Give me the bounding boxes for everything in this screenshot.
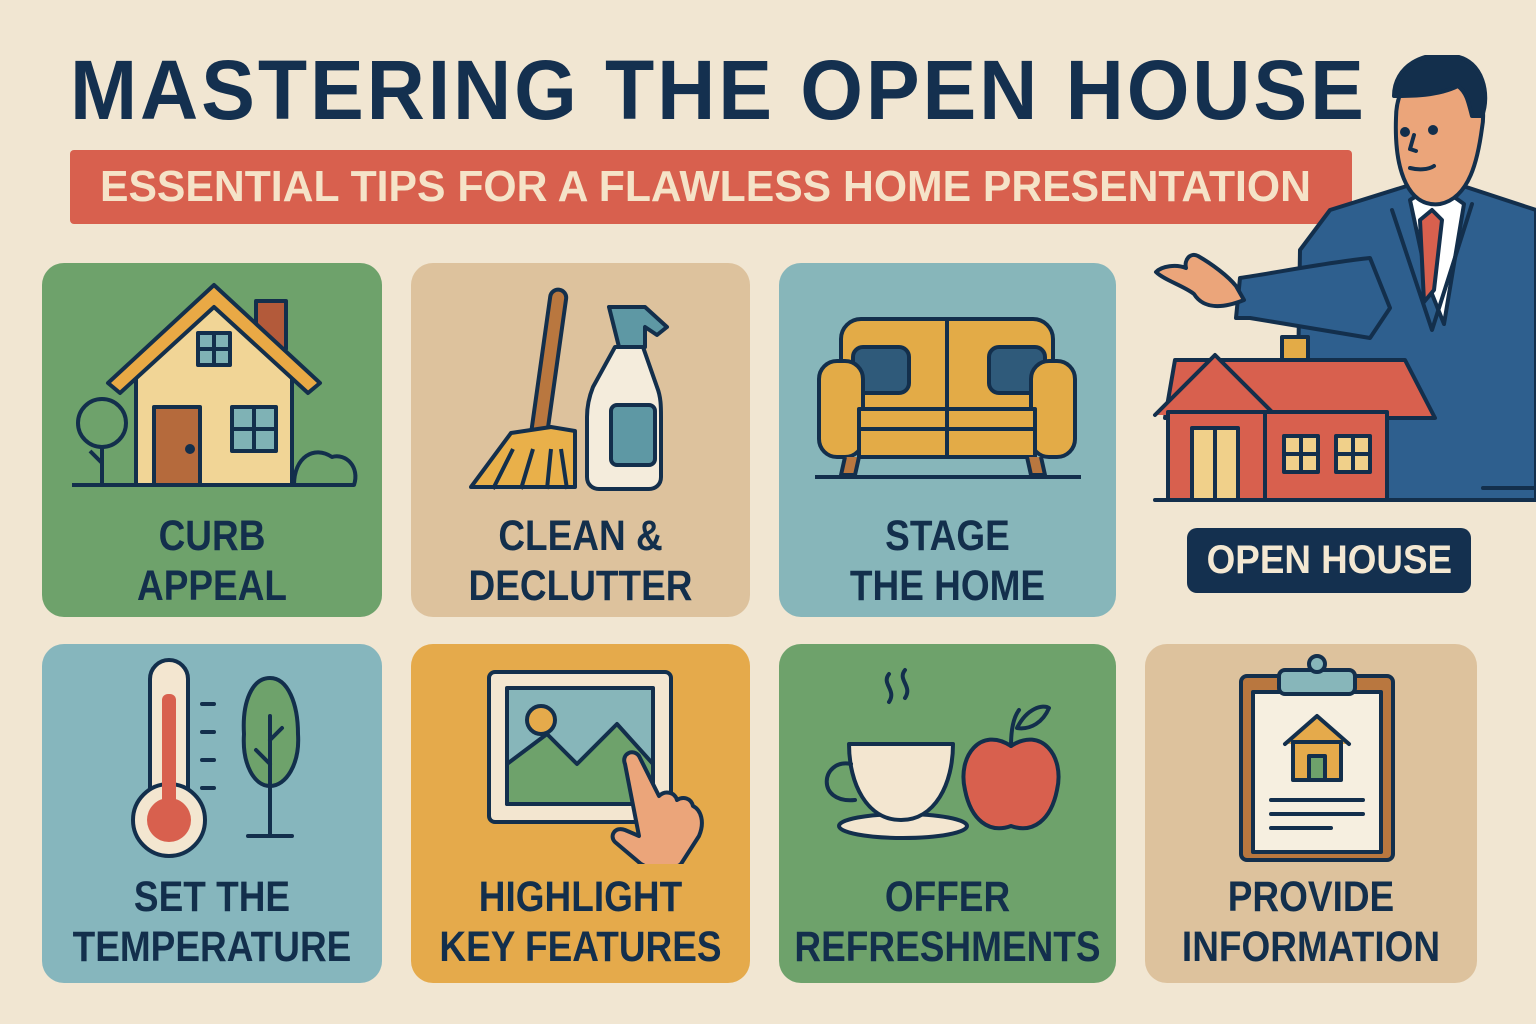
panel: provide information [1145, 644, 1477, 983]
icon: clipboard [1239, 654, 1395, 862]
icon: sofa [815, 317, 1081, 479]
title: MASTERING THE OPEN HOUSE [70, 43, 1367, 137]
label [73, 873, 351, 971]
icon: house [72, 282, 358, 487]
label: KEY FEATURES [439, 923, 722, 971]
subtitle banner: ESSENTIAL TIPS FOR A FLAWLESS HOME PRESENTATION [100, 162, 1311, 211]
label [439, 873, 722, 971]
illustration: agent with house [1152, 55, 1536, 502]
badge: open house [1187, 528, 1471, 593]
label: INFORMATION [1182, 923, 1440, 971]
label: PROVIDE [1228, 873, 1394, 921]
label: REFRESHMENTS [794, 923, 1101, 971]
panel: highlight key features [411, 644, 750, 983]
icon: broom and spray bottle [469, 288, 670, 491]
label: SET THE [134, 873, 290, 921]
label: STAGE [885, 512, 1010, 560]
label [137, 512, 287, 610]
panel: set the temperature [42, 644, 382, 983]
label: OFFER [885, 873, 1010, 921]
panel: curb appeal [42, 263, 382, 617]
label [850, 512, 1045, 610]
label [1182, 873, 1440, 971]
icon: thermometer and tree [131, 658, 300, 858]
label [469, 512, 692, 610]
panel: stage the home [779, 263, 1116, 617]
label: THE HOME [850, 562, 1045, 610]
panel: clean & declutter [411, 263, 750, 617]
label: DECLUTTER [469, 562, 692, 610]
label: CLEAN & [498, 512, 663, 560]
label: TEMPERATURE [73, 923, 351, 971]
icon: picture with pointing hand [487, 670, 704, 864]
label: CURB [159, 512, 265, 560]
label: APPEAL [137, 562, 287, 610]
icon: coffee cup and apple [824, 668, 1061, 840]
badge: open house: OPEN HOUSE [1206, 538, 1452, 582]
label: HIGHLIGHT [479, 873, 682, 921]
panel: offer refreshments [779, 644, 1116, 983]
label [794, 873, 1101, 971]
subtitle banner [70, 150, 1352, 224]
